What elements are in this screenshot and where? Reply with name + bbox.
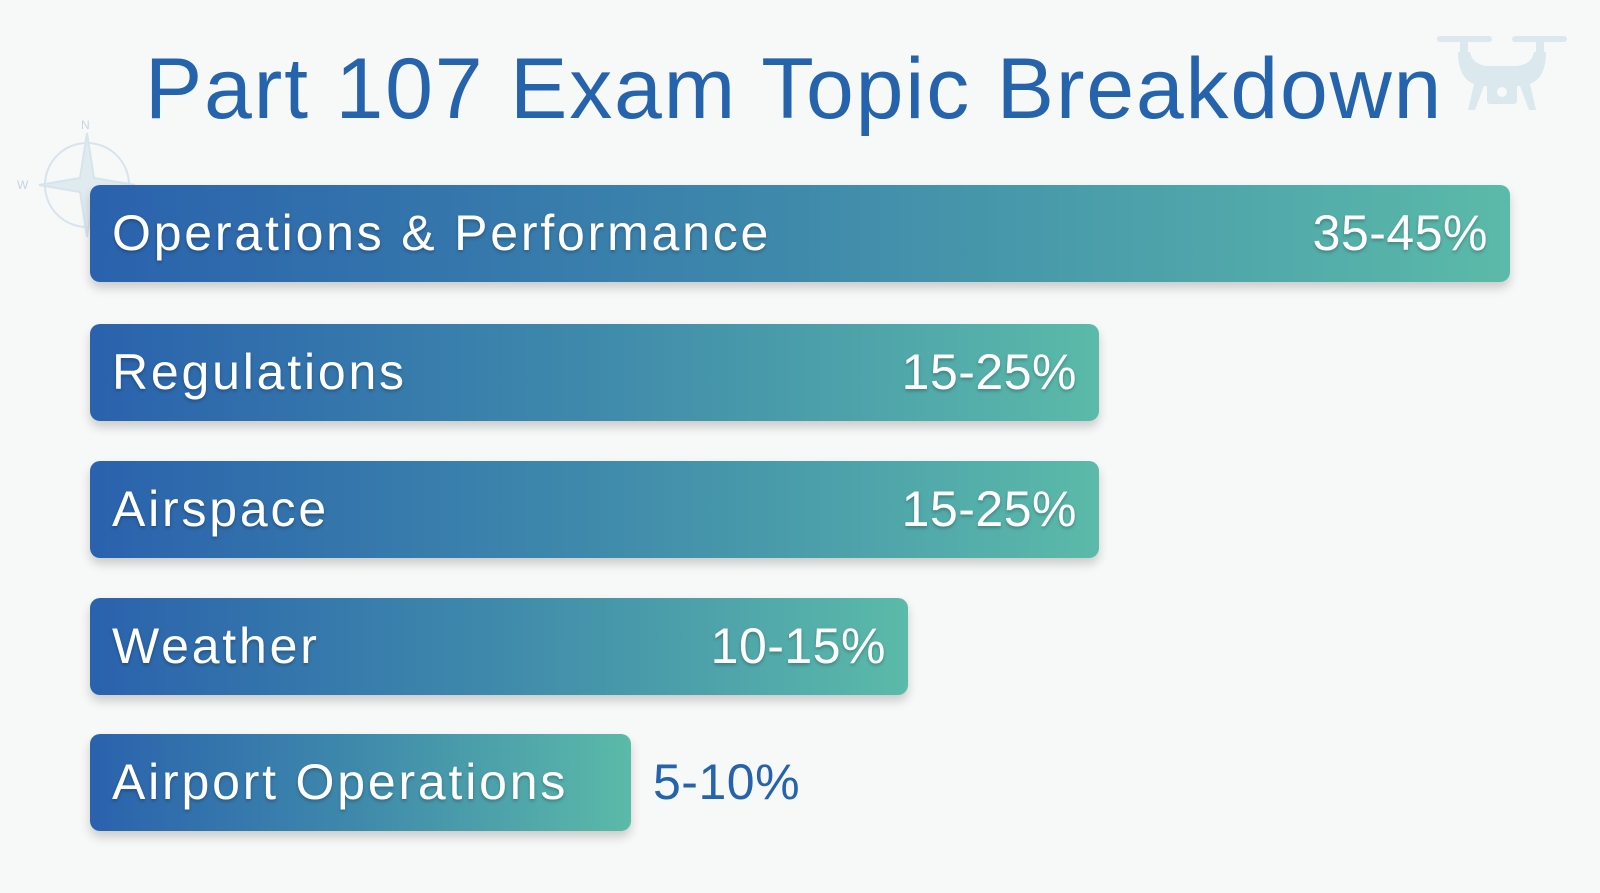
bar: Airport Operations: Airport Operations [112,754,568,810]
value: 5-10%: 5-10% [653,754,800,810]
bar: Airspace: 15-25% [902,481,1077,537]
bar: Operations & Performance: 35-45% [1313,205,1488,261]
icon: compass [17,118,136,237]
icon: compass: N [81,118,90,132]
bar: Regulations: 15-25% [902,344,1077,400]
bar: Weather [90,598,908,695]
bar: Regulations: Regulations [112,344,407,400]
bar: Weather: Weather [112,618,320,674]
bar: Operations & Performance [90,185,1510,282]
bar: Regulations [90,324,1099,421]
icon: drone [1437,36,1567,110]
bar: Airspace: Airspace [112,481,329,537]
title: Part 107 Exam Topic Breakdown [145,41,1443,137]
bar: Airspace [90,461,1099,558]
bar: Airport Operations [90,734,631,831]
icon: compass: W [17,178,29,192]
bar: Weather: 10-15% [711,618,886,674]
bar: Operations & Performance: Operations & Performance [112,205,771,261]
